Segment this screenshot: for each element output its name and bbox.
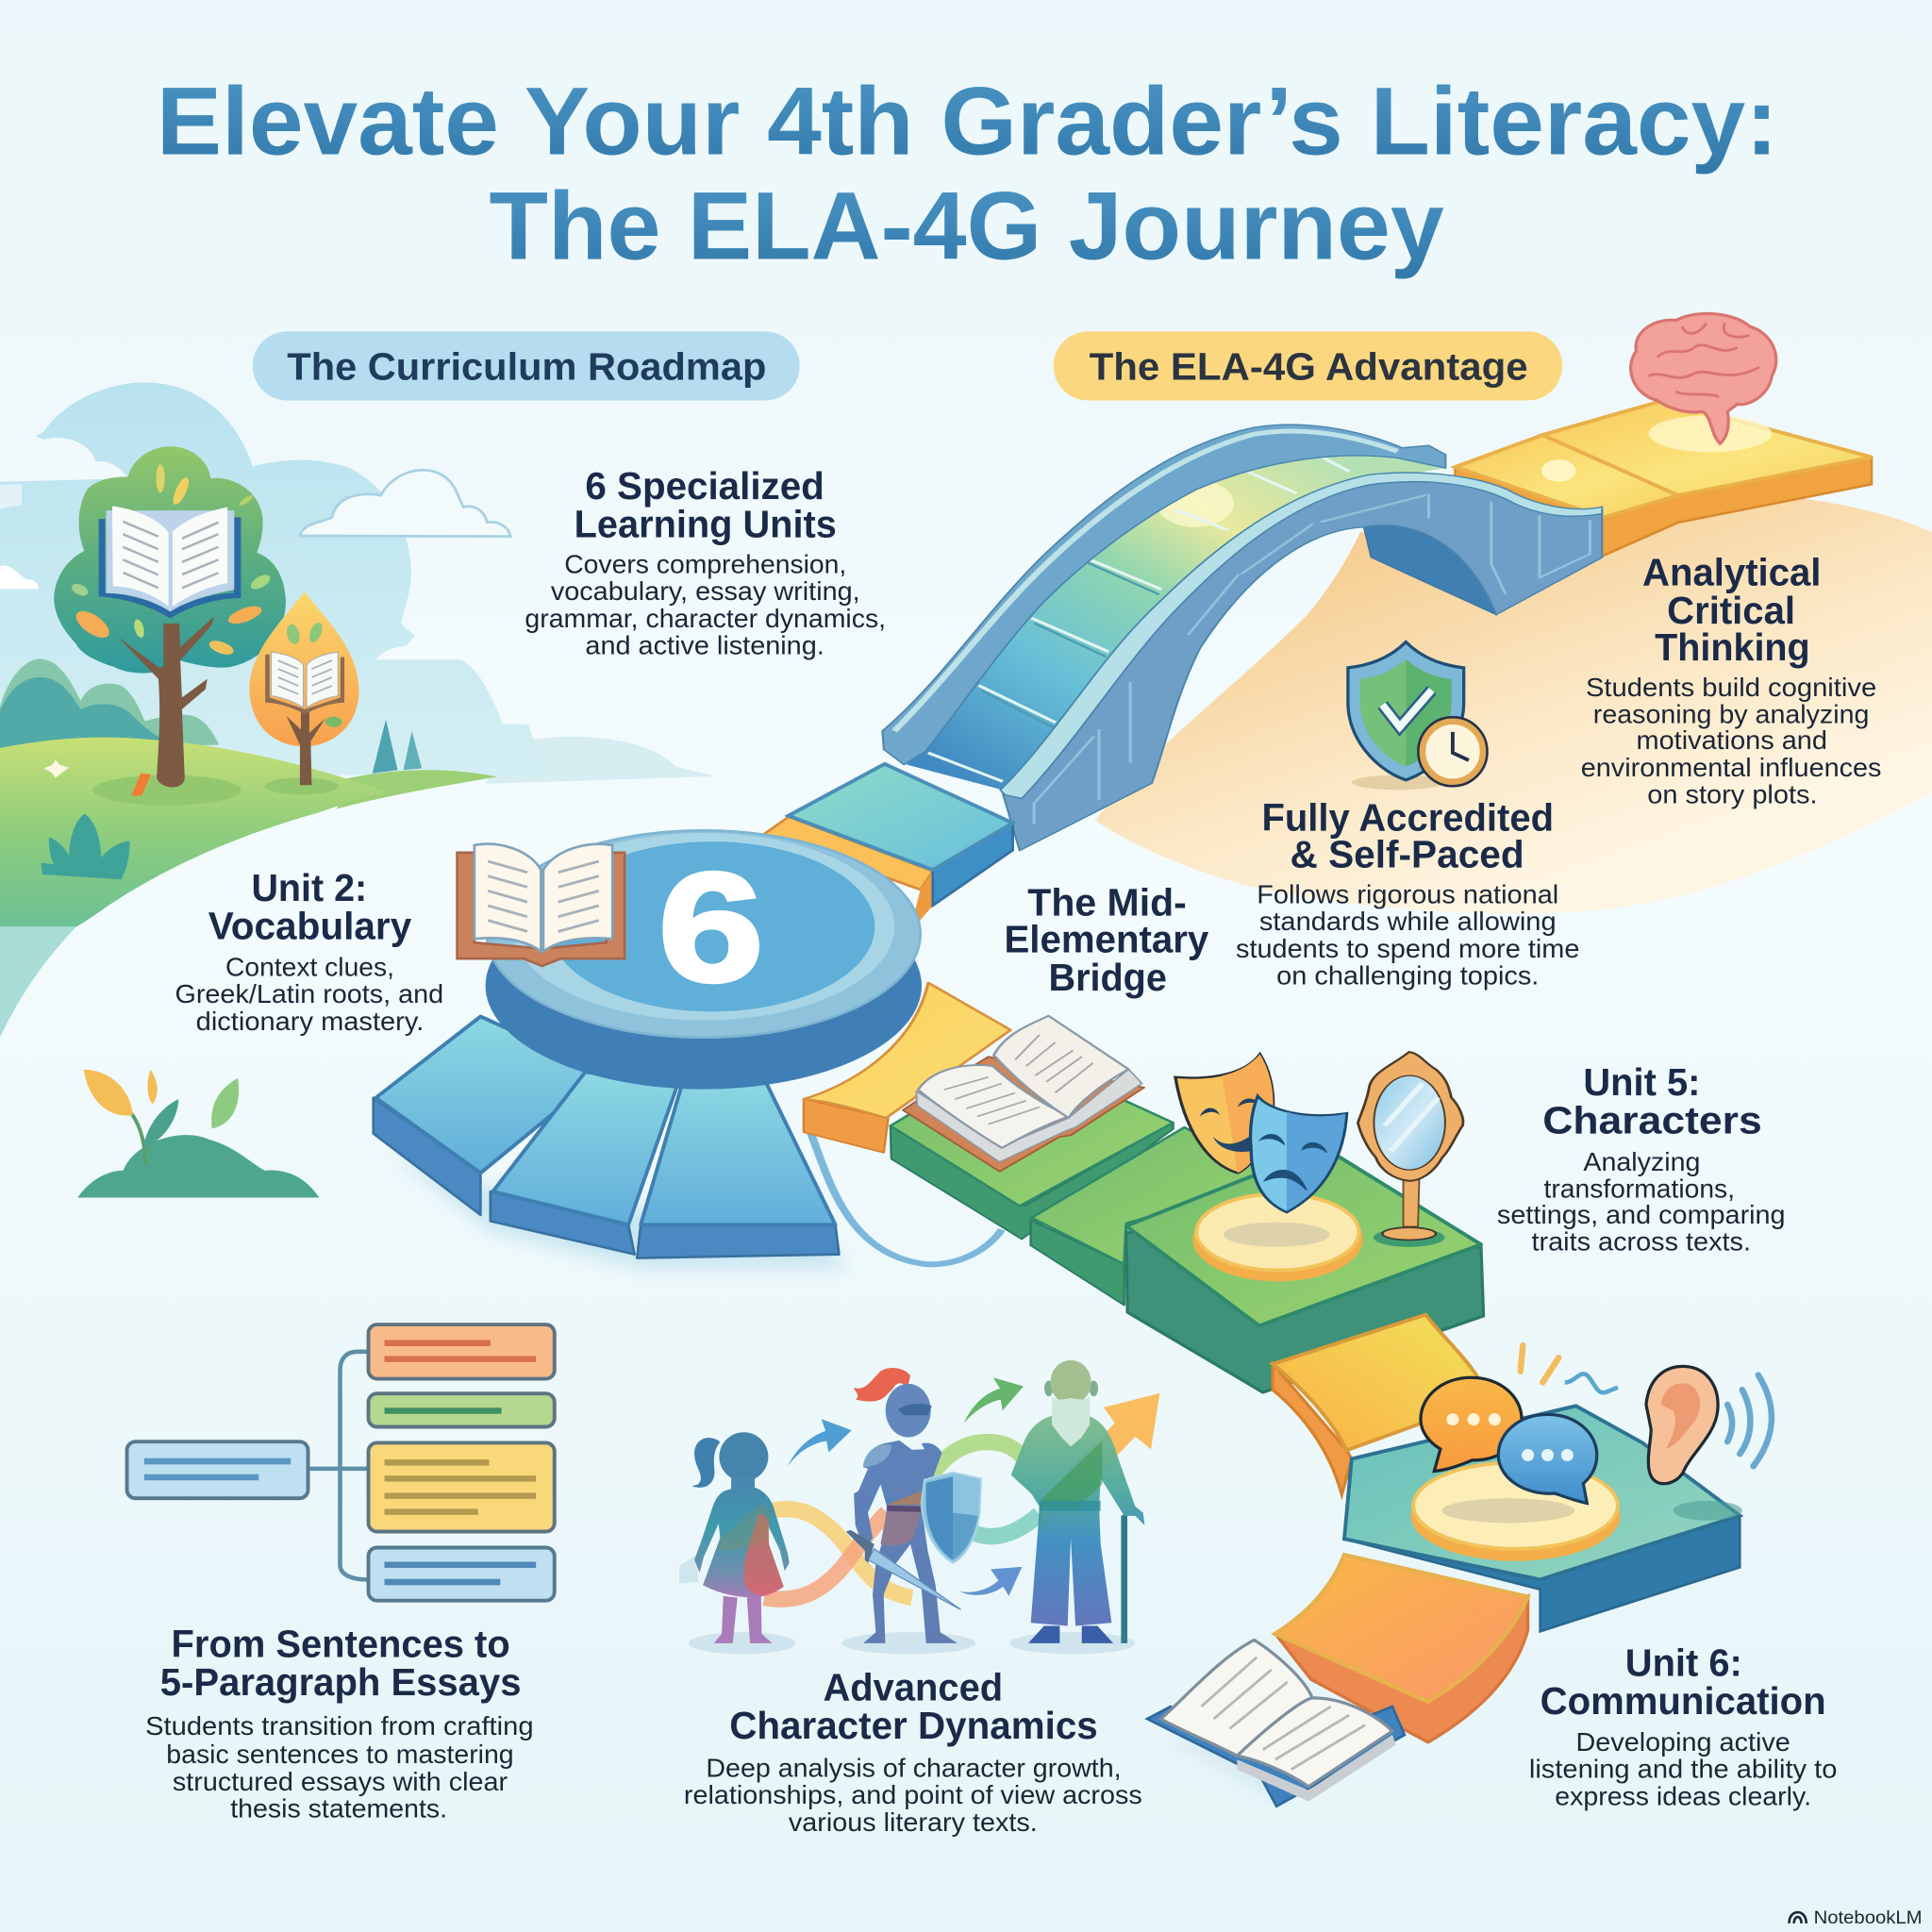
text: unit 5 characters: transformations, (1544, 1174, 1735, 1204)
title: The ELA-4G Journey (490, 172, 1444, 279)
text: the mid-elementary bridge: Elementary (1004, 918, 1209, 961)
text: 6 specialized learning units: grammar, character dynamics, (525, 604, 886, 633)
text: advanced character dynamics: Character Dynamics (729, 1704, 1098, 1747)
text: analytical critical thinking (1581, 550, 1881, 809)
bridge arch interior (1364, 521, 1496, 615)
text: analytical critical thinking: motivations and (1637, 725, 1827, 755)
icon: comedy and tragedy masks (1175, 1054, 1347, 1212)
title: Elevate Your 4th Grader’s Literacy: (157, 67, 1778, 175)
path: yellow tile to communication (1273, 1315, 1490, 1494)
distant pale hill (487, 737, 716, 784)
text: unit 6 communication: express ideas clearly. (1555, 1781, 1811, 1810)
text: advanced character dynamics: relationships, and point of view across (684, 1780, 1142, 1809)
text: 6 specialized learning units: and active listening. (585, 631, 824, 660)
text: analytical critical thinking: reasoning by analyzing (1593, 700, 1869, 729)
text: unit 6 communication: Developing active (1576, 1727, 1790, 1757)
bridge front rail (1000, 473, 1602, 798)
icon: shield with clock (1348, 641, 1487, 790)
golden path tiles (1456, 400, 1872, 556)
green tile: second (1031, 1127, 1282, 1305)
text: unit 5 characters: settings, and comparing (1497, 1200, 1786, 1229)
step block: characters (1126, 1157, 1484, 1392)
text: 6 specialized learning units: 6 Specialized (585, 464, 824, 508)
green tile: first (891, 1050, 1174, 1239)
tree: large with book (54, 446, 286, 788)
text: unit 2 vocabulary: Unit 2: (251, 866, 367, 909)
decorative plant: bush with leaves (77, 1070, 319, 1198)
bridge deck (907, 456, 1445, 790)
orange tile under bridge (764, 817, 933, 933)
text: unit 2 vocabulary: Vocabulary (208, 904, 412, 947)
text: the mid-elementary bridge: Bridge (1049, 956, 1167, 999)
text: fully accredited and self-paced: & Self-Paced (1291, 833, 1524, 876)
mask: tragedy (1251, 1096, 1347, 1212)
title (157, 67, 1778, 279)
notebooklm credit: NotebookLM (1814, 1907, 1923, 1928)
text: analytical critical thinking: Students build cognitive (1586, 673, 1876, 702)
text: unit 5 characters: Characters (1542, 1099, 1762, 1142)
arrow: large orange (1040, 1393, 1159, 1535)
hill: advantage sand (1095, 490, 1932, 913)
text: analytical critical thinking: environmental influences (1581, 753, 1881, 782)
badge: ELA-4G advantage: The ELA-4G Advantage (1090, 344, 1528, 388)
text: unit 2 vocabulary: dictionary mastery. (196, 1007, 424, 1036)
water strip (0, 926, 76, 1038)
landscape illustration (0, 382, 546, 926)
text: 6 specialized learning units: vocabulary, essay writing, (551, 576, 860, 606)
text: advanced character dynamics: Advanced (823, 1665, 1003, 1708)
text: analytical critical thinking: Analytical (1642, 550, 1821, 593)
text: unit 2 vocabulary: Greek/Latin roots, and (175, 979, 443, 1008)
icon: open book on hub (458, 844, 625, 966)
paragraph box: green (369, 1393, 555, 1426)
character growth illustration (679, 1360, 1159, 1655)
growth ribbon (764, 1442, 1040, 1599)
text: the mid-elementary bridge: The Mid- (1027, 880, 1187, 924)
paragraph box: blue (369, 1547, 555, 1601)
text: 6 specialized learning units (525, 464, 886, 660)
fan of hub tiles (374, 1017, 850, 1269)
paragraph box: yellow (369, 1442, 555, 1532)
path: yellow tile beside hub (804, 983, 1282, 1305)
teal tile below bridge (789, 764, 1013, 906)
text: advanced character dynamics (684, 1665, 1142, 1837)
icon: speech bubbles (1421, 1377, 1597, 1503)
essay structure diagram (127, 1324, 555, 1601)
text: fully accredited and self-paced: standards while allowing (1259, 907, 1557, 936)
text: analytical critical thinking: Thinking (1655, 625, 1810, 669)
icon: open book at path end (1147, 1640, 1405, 1807)
flower (43, 760, 69, 777)
green hill (337, 770, 497, 808)
figure: girl (691, 1432, 790, 1643)
bridge back rail (882, 425, 1445, 765)
text: 6 specialized learning units: Learning Units (575, 502, 837, 545)
text: unit 5 characters (1497, 1060, 1786, 1257)
badge: curriculum roadmap: The Curriculum Roadmap (287, 344, 766, 388)
text: analytical critical thinking: Critical (1667, 589, 1795, 632)
text: unit 6 communication: listening and the ability to (1529, 1755, 1837, 1784)
cloud outlined (300, 470, 510, 537)
text: 6 specialized learning units: Covers comprehension, (564, 549, 846, 578)
step block: communication (1344, 1406, 1742, 1631)
bush (42, 814, 130, 879)
text: fully accredited and self-paced: Fully Accredited (1261, 795, 1554, 839)
text: advanced character dynamics: Deep analysis of character growth, (706, 1753, 1122, 1782)
text: from sentences to essays: structured essays with clear (173, 1767, 508, 1796)
text: the mid-elementary bridge (1004, 880, 1209, 999)
paragraph box: orange (369, 1324, 555, 1379)
arrow: blue (788, 1419, 852, 1466)
figure: elder (1011, 1360, 1144, 1643)
text: from sentences to essays (145, 1623, 534, 1824)
text: from sentences to essays: From Sentences to (172, 1623, 510, 1666)
text: from sentences to essays: 5-Paragraph Essays (160, 1660, 521, 1704)
text: unit 6 communication: Communication (1541, 1679, 1826, 1723)
arrow: green (964, 1377, 1024, 1424)
text: analytical critical thinking: on story plots. (1647, 780, 1818, 809)
text: from sentences to essays: Students transition from crafting (145, 1711, 534, 1740)
connector loop (810, 1132, 1002, 1264)
text: unit 5 characters: Unit 5: (1583, 1060, 1700, 1104)
badge: ELA-4G advantage (1054, 331, 1562, 400)
tree: small with book (249, 591, 358, 785)
knight sword (846, 1530, 960, 1609)
mask: comedy (1175, 1054, 1274, 1173)
hub disc with number 6 (486, 830, 922, 1090)
text: fully accredited and self-paced: Follows rigorous national (1257, 879, 1558, 908)
text: unit 5 characters: Analyzing (1583, 1147, 1700, 1176)
badge: curriculum roadmap (253, 331, 800, 400)
figure: knight (846, 1368, 981, 1643)
icon: book on tile (903, 1016, 1144, 1172)
mid-elementary bridge (882, 425, 1602, 851)
text: advanced character dynamics: various literary texts. (789, 1807, 1038, 1837)
text: fully accredited and self-paced: on challenging topics. (1276, 961, 1539, 991)
text: fully accredited and self-paced: students to spend more time (1236, 934, 1579, 963)
thesis box (127, 1441, 308, 1498)
bridge side face (1003, 474, 1602, 851)
text: unit 6 communication (1529, 1641, 1837, 1810)
hub disc with number 6: 6 (658, 841, 764, 1014)
orange marker (131, 774, 151, 796)
icon: mirror (1357, 1052, 1463, 1247)
text: unit 2 vocabulary (175, 866, 443, 1036)
text: from sentences to essays: thesis statements. (230, 1794, 447, 1824)
arrow: small blue (959, 1567, 1022, 1596)
path: orange tile (1275, 1555, 1528, 1742)
text: unit 6 communication: Unit 6: (1625, 1641, 1742, 1684)
icon: ear with sound waves (1521, 1345, 1772, 1484)
text: unit 2 vocabulary: Context clues, (225, 952, 394, 981)
text: from sentences to essays: basic sentences to mastering (166, 1740, 514, 1769)
text: unit 5 characters: traits across texts. (1532, 1227, 1751, 1257)
text: fully accredited and self-paced (1236, 795, 1579, 991)
knight shield (922, 1473, 981, 1563)
icon: brain (1631, 313, 1776, 443)
